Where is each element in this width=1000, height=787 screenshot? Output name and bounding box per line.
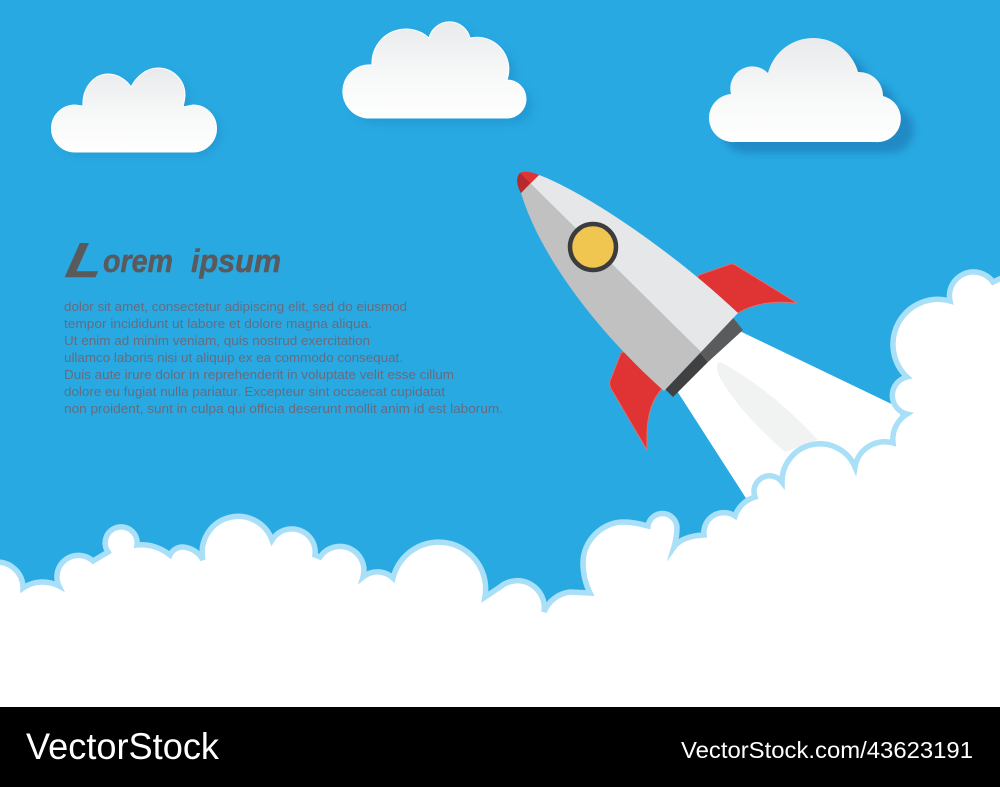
heading: Lorem ipsum: orem bbox=[103, 243, 173, 279]
body text: dolor sit amet, consectetur adipiscing elit, sed do eiusmod bbox=[64, 299, 407, 314]
cloud bank bbox=[0, 272, 1000, 712]
rocket engine band bbox=[660, 314, 743, 397]
heading: Lorem ipsum bbox=[62, 232, 281, 288]
footer image id: VectorStock.com/43623191 bbox=[681, 737, 973, 763]
rocket body light side bbox=[530, 175, 738, 352]
body text: tempor incididunt ut labore et dolore magna aliqua. bbox=[64, 316, 372, 331]
body text: Ut enim ad minim veniam, quis nostrud exercitation bbox=[64, 333, 370, 348]
rocket left fin bbox=[610, 345, 670, 450]
rocket exhaust flame bbox=[670, 324, 902, 520]
body text: ullamco laboris nisi ut aliquip ex ea commodo consequat. bbox=[64, 350, 403, 365]
footer bar bbox=[0, 707, 1000, 787]
heading: Lorem ipsum: ipsum bbox=[191, 243, 281, 279]
rocket body shadow side bbox=[521, 183, 701, 391]
body text: Duis aute irure dolor in reprehenderit in voluptate velit esse cillum bbox=[64, 367, 454, 382]
body text bbox=[64, 299, 503, 416]
body text: dolore eu fugiat nulla pariatur. Excepteur sint occaecat cupidatat bbox=[64, 384, 445, 399]
rocket nose cone bbox=[517, 172, 539, 193]
cloud: top centre bbox=[343, 22, 533, 124]
heading: Lorem ipsum: L bbox=[62, 232, 109, 288]
cloud: top right bbox=[709, 38, 914, 153]
rocket window bbox=[570, 224, 616, 270]
cloud: top left bbox=[51, 68, 221, 156]
body text: non proident, sunt in culpa qui officia deserunt mollit anim id est laborum. bbox=[64, 401, 503, 416]
footer logo text: VectorStock bbox=[26, 726, 219, 767]
rocket right fin bbox=[690, 264, 797, 320]
rocket bbox=[517, 172, 797, 450]
